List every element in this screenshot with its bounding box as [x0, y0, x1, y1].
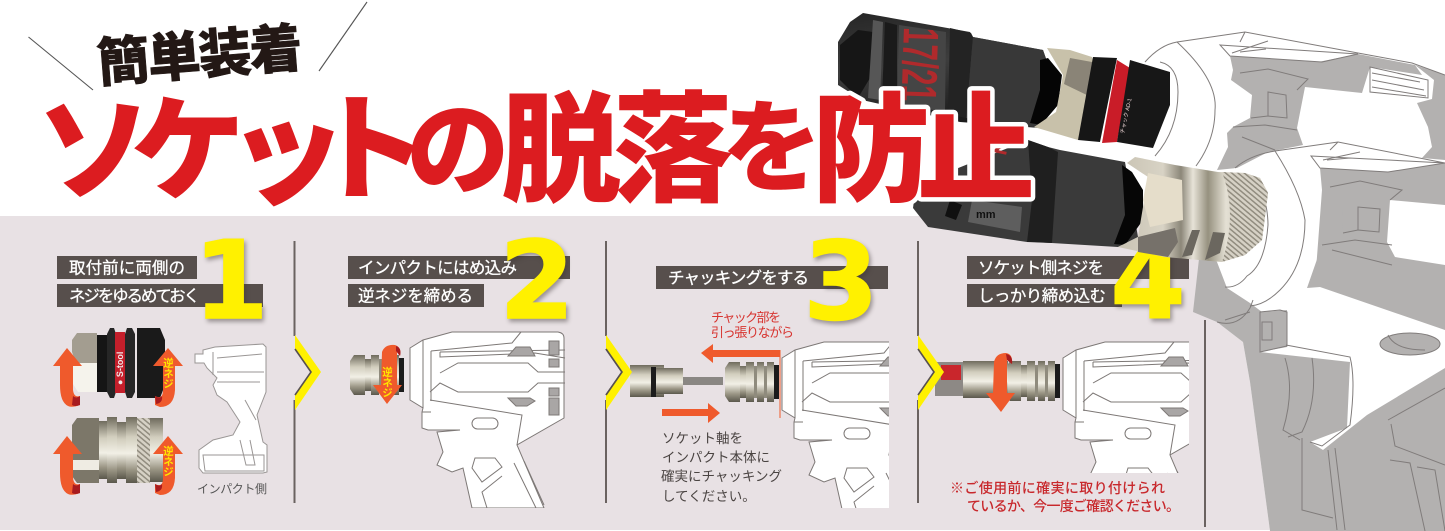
main title: ト [312, 85, 428, 215]
chevron [606, 335, 632, 410]
number 4: 4 [1110, 219, 1186, 344]
panel: steps background [0, 216, 1445, 530]
note: chuck socket [661, 431, 782, 504]
step 1 [53, 219, 269, 496]
number 2: 2 [499, 219, 575, 344]
illustration: driver [410, 332, 565, 508]
arrow: tighten [986, 353, 1015, 412]
arrow: left loosen lower [53, 436, 82, 495]
main title: 脱 [501, 84, 621, 218]
labels: step 4: ソケット側ネジを [978, 258, 1104, 278]
caption: impact side: インパクト側 [197, 482, 267, 496]
main title: ト [312, 85, 428, 215]
fitting on driver [725, 362, 779, 402]
main title: を [722, 93, 822, 205]
main title: ッ [227, 86, 347, 220]
note: pull chuck: 引っ張りながら [711, 325, 794, 340]
note: chuck socket: 確実にチャッキング [661, 469, 782, 484]
arrow: right reverse thread: 逆ネジ [162, 356, 174, 389]
number 1: 1 [193, 219, 269, 344]
divider: step 2-3 [606, 241, 632, 503]
label bar: step 3: チャッキングをする [668, 268, 809, 288]
main title: ッ [227, 86, 347, 220]
background illustration: impact drivers [1145, 32, 1445, 531]
main title: の [406, 93, 510, 208]
warning note [950, 480, 1180, 514]
fitting: black socket side [72, 328, 165, 398]
label bars: step 2: インパクトにはめ込み [358, 258, 517, 278]
arrow: reverse thread tighten: 逆ネジ [381, 365, 393, 398]
product photo: upper socket: 17/21 [890, 27, 949, 103]
note: pull chuck: チャック部を [711, 310, 781, 325]
heading: easy installation: 簡単装着 [95, 19, 305, 94]
main title: を [722, 93, 822, 205]
label bars: step 2: 逆ネジを締める [358, 286, 473, 306]
arrow: insert [662, 403, 720, 423]
arrow: pull chuck [701, 344, 780, 418]
product photo: upper socket: チャック AD-1 [1119, 98, 1133, 134]
label bar: step 3 [656, 266, 888, 289]
label bars: step 1: ネジをゆるめておく [69, 286, 200, 306]
divider: after step 4 [1204, 320, 1206, 527]
divider: step 3-4 [917, 241, 919, 503]
fitting on driver [1006, 361, 1060, 401]
illustration: driver [782, 342, 889, 508]
arrow: right reverse thread lower [153, 436, 183, 495]
number 3: 3 [803, 220, 879, 345]
main title: ケ [131, 89, 245, 216]
main title: 止 [917, 86, 1035, 218]
socket with bit [630, 365, 723, 397]
fitting on driver [350, 355, 404, 395]
main title: ケ [131, 89, 245, 216]
main title: ソ [37, 89, 151, 216]
step 2 [348, 219, 575, 508]
label bars: step 1 [57, 256, 263, 307]
product photo: upper socket [838, 13, 1170, 148]
arrow: reverse thread tighten [373, 345, 402, 404]
note: chuck socket: ソケット軸を [662, 431, 743, 446]
note: pull chuck [711, 310, 794, 340]
product photo: lower socket: mm [976, 209, 996, 221]
main title: 防 [812, 86, 930, 218]
main title: 防 [812, 86, 930, 218]
icon: small impact driver [195, 344, 267, 473]
note: chuck socket: インパクト本体に [662, 450, 770, 465]
main title: の [406, 93, 510, 208]
main title: ソ [37, 89, 151, 216]
label bars: step 4 [967, 256, 1189, 307]
arrow: right reverse thread [153, 348, 183, 407]
labels: step 4 [978, 258, 1106, 306]
label bars: step 1: 取付前に両側の [69, 258, 185, 278]
product photo: lower socket [913, 129, 1268, 262]
product photo: lower socket: 2 [992, 129, 1012, 161]
illustration: driver [1062, 342, 1189, 473]
arrow: left loosen [53, 348, 82, 407]
note: chuck socket: してください。 [662, 489, 756, 504]
divider: step 1-2 [294, 241, 321, 503]
fitting: silver coupler [72, 417, 163, 483]
decorative line [28, 37, 93, 90]
chevron [918, 335, 944, 410]
main title: 落 [613, 84, 733, 218]
warning note: ※ご使用前に確実に取り付けられ [950, 480, 1165, 496]
socket [935, 361, 1008, 398]
labels: step 4: しっかり締め込む [978, 286, 1106, 306]
main title: 脱 [501, 84, 621, 218]
label bars: step 2 [348, 256, 570, 307]
step 4 [917, 251, 1189, 512]
main title: 落 [613, 84, 733, 218]
main title: 止 [917, 86, 1035, 218]
arrow: right reverse thread lower: 逆ネジ [162, 444, 174, 477]
fitting: black socket side: ● S-tool [115, 352, 125, 385]
warning note: ているか、今一度ご確認ください。 [967, 498, 1180, 514]
step 3 [605, 238, 889, 508]
main title [37, 84, 1035, 220]
